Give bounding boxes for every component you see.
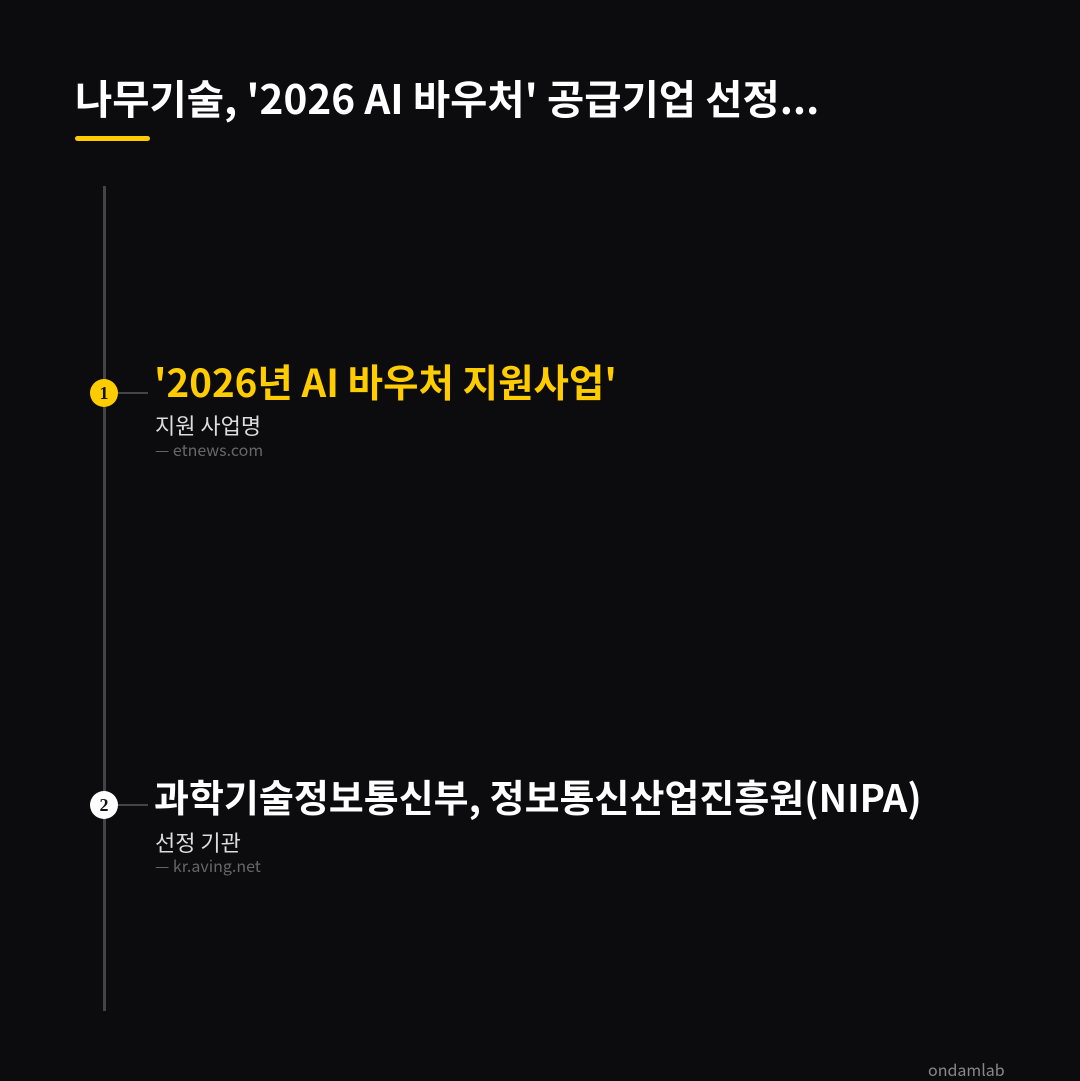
marker 1: 1 (100, 383, 108, 403)
source 1: — etnews.com (155, 437, 263, 461)
marker 2 (90, 791, 118, 819)
marker 1 (90, 379, 118, 407)
timeline line (103, 186, 106, 1011)
marker 2: 2 (100, 795, 108, 815)
source 2: — kr.aving.net (155, 853, 261, 877)
heading 1: '2026년 AI 바우처 지원사업' (154, 353, 617, 409)
item 2 (90, 768, 922, 877)
item 1 (90, 353, 617, 461)
title: 나무기술, '2026 AI 바우처' 공급기업 선정... (75, 67, 819, 126)
label 1: 지원 사업명 (155, 409, 261, 441)
title underline (75, 136, 150, 141)
label 2: 선정 기관 (155, 826, 241, 858)
footer brand: ondamlab (928, 1057, 1005, 1081)
heading 2: 과학기술정보통신부, 정보통신산업진흥원(NIPA) (154, 768, 922, 823)
